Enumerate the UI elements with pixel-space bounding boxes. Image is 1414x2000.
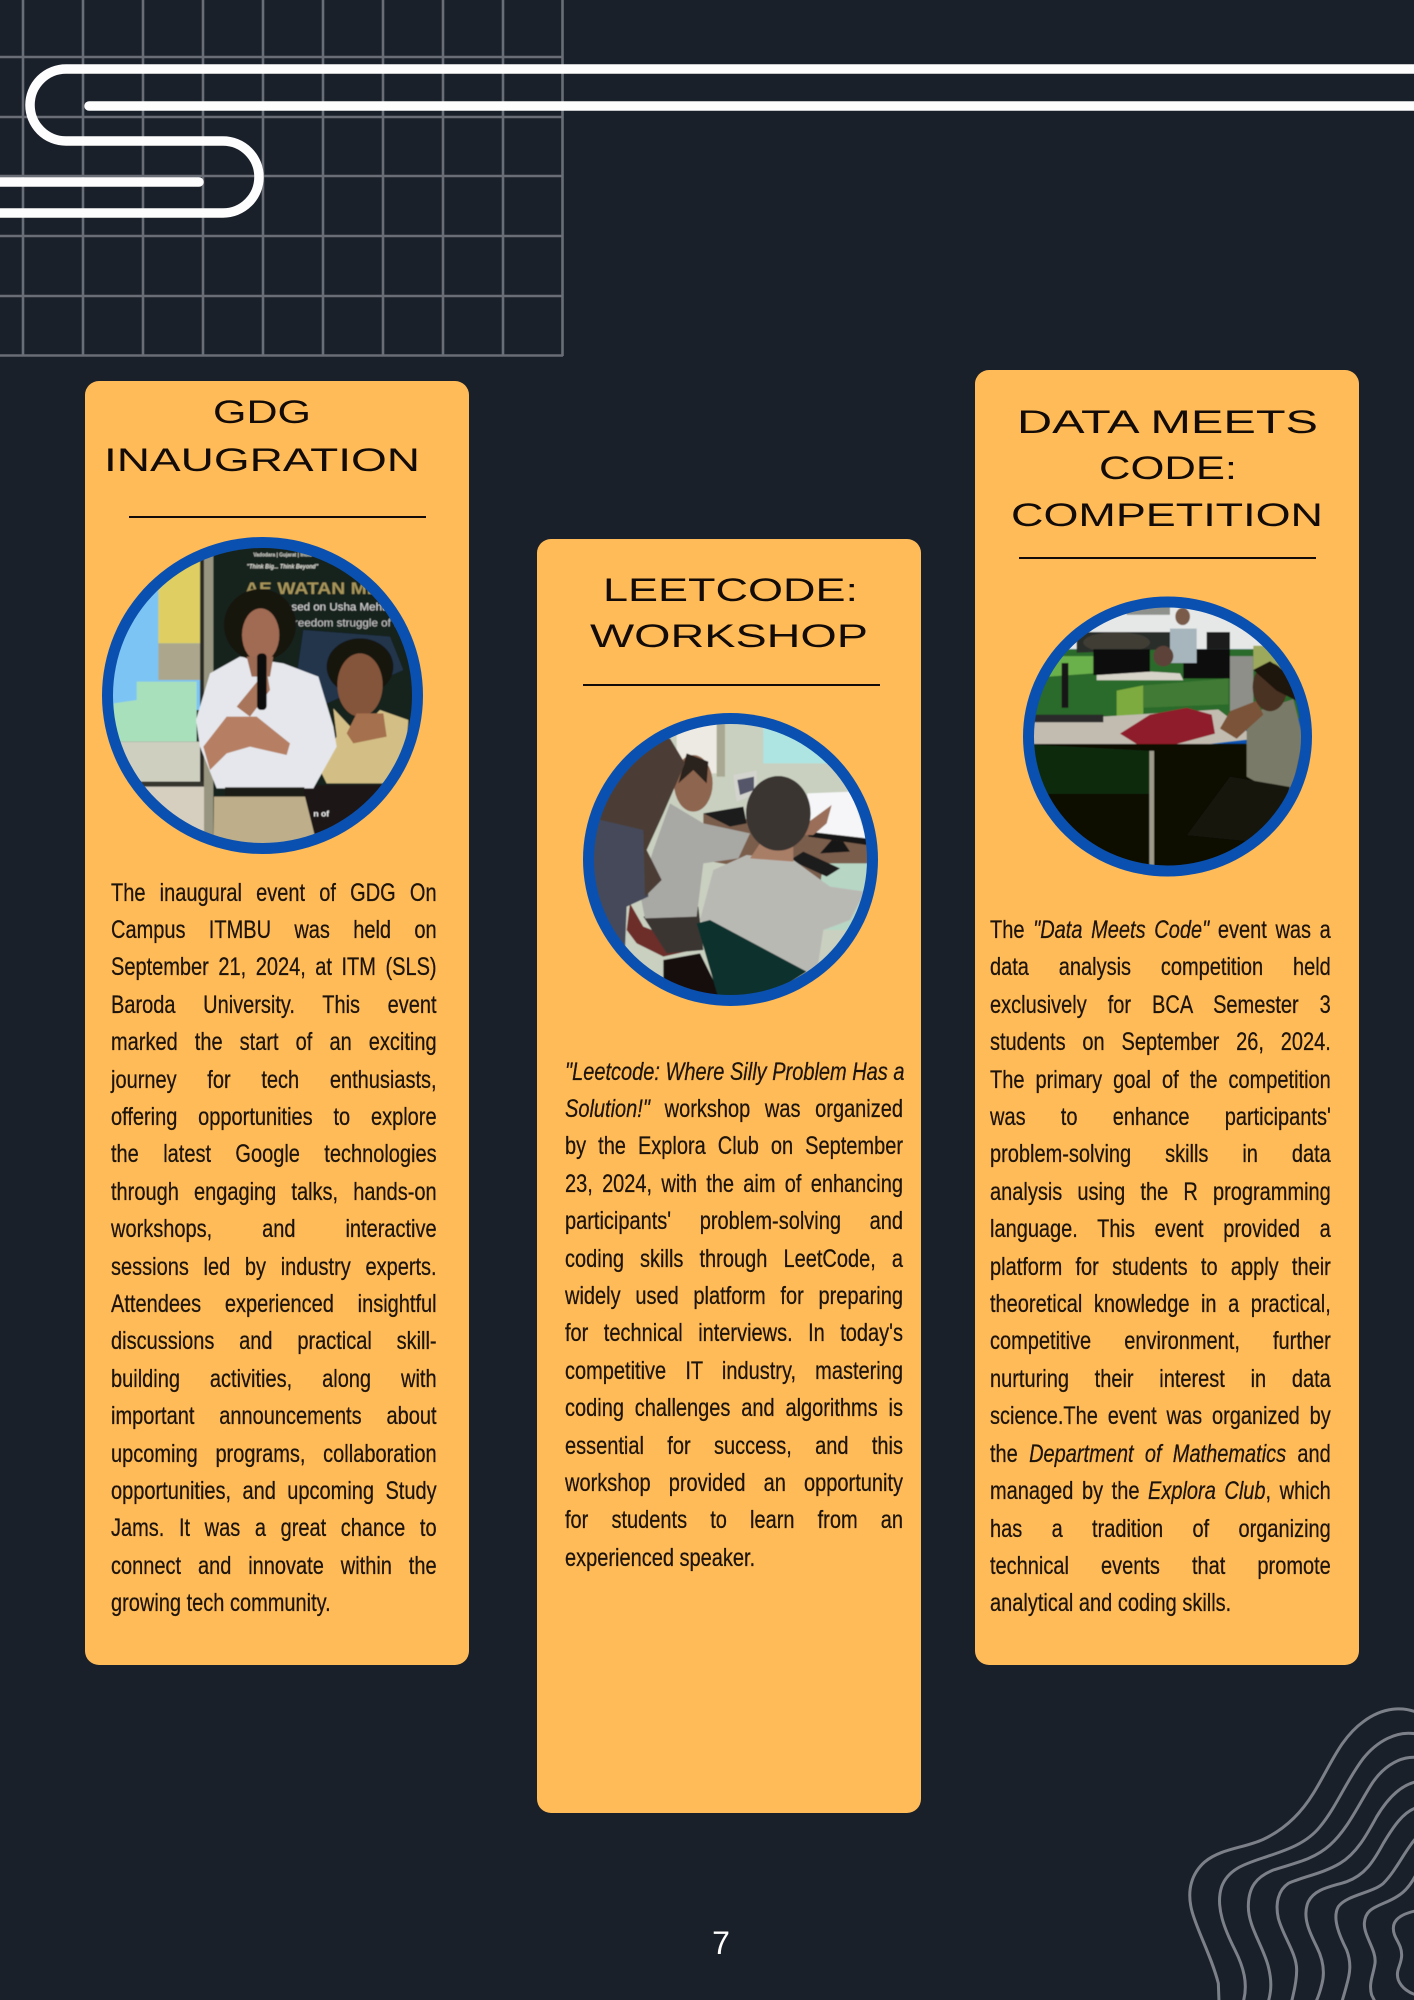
decorative contour waves: [1188, 1707, 1414, 2000]
panel: GDG inauguration: [85, 381, 469, 1665]
text block: GDG inauguration description: The inaugural event of GDG On: [110, 878, 436, 906]
text block: LeetCode workshop description: for technical interviews. In today's: [565, 1319, 903, 1347]
heading: GDG Inaugration: GDG: [213, 394, 311, 430]
text block: GDG inauguration description: Campus ITMBU was held on: [110, 916, 436, 944]
heading: LeetCode workshop: [590, 572, 868, 654]
decorative grid and white ribbon line: [0, 0, 1414, 357]
text block: Data Meets Code description: theoretical knowledge in a practical,: [990, 1290, 1330, 1318]
text block: Data Meets Code description: has a tradition of organizing: [990, 1514, 1330, 1542]
text block: GDG inauguration description: offering opportunities to explore: [110, 1103, 436, 1131]
text block: GDG inauguration description: marked the start of an exciting: [110, 1028, 436, 1056]
text block: LeetCode workshop description: Solution!" workshop was organized: [565, 1095, 903, 1123]
text block: GDG inauguration description: discussions and practical skill-: [110, 1327, 436, 1355]
text block: LeetCode workshop description: by the Explora Club on September: [565, 1132, 903, 1160]
heading: Data Meets Code competition: [1011, 404, 1323, 533]
text block: Data Meets Code description: analytical and coding skills.: [990, 1589, 1231, 1617]
text block: Data Meets Code description: managed by the Explora Club, which: [990, 1477, 1330, 1505]
text block: LeetCode workshop description: essential for success, and this: [565, 1432, 903, 1460]
text block: LeetCode workshop description: participants' problem-solving and: [565, 1207, 903, 1235]
text block: GDG inauguration description: journey for tech enthusiasts,: [110, 1066, 436, 1094]
text block: Data Meets Code description: science.The event was organized by: [990, 1402, 1330, 1430]
text block: LeetCode workshop description: coding skills through LeetCode, a: [565, 1245, 903, 1273]
text block: Data Meets Code description: [990, 916, 1331, 1617]
text block: Data Meets Code description: analysis using the R programming: [990, 1178, 1330, 1206]
text block: GDG inauguration description: workshops, and interactive: [110, 1215, 436, 1243]
text block: Data Meets Code description: platform for students to apply their: [990, 1253, 1330, 1281]
text block: GDG inauguration description: Baroda University. This event: [110, 991, 436, 1019]
text block: Data Meets Code description: students on September 26, 2024.: [990, 1028, 1330, 1056]
text block: Data Meets Code description: technical events that promote: [990, 1552, 1330, 1580]
text block: GDG inauguration description: upcoming programs, collaboration: [110, 1440, 436, 1468]
page number: 7: [712, 1925, 730, 1961]
photo: competition in a computer lab: [1020, 594, 1320, 882]
heading: GDG Inaugration: INAUGRATION: [104, 442, 420, 478]
text block: Data Meets Code description: the Department of Mathematics and: [990, 1440, 1330, 1468]
text block: GDG inauguration description: building activities, along with: [110, 1365, 436, 1393]
text block: GDG inauguration description: September 21, 2024, at ITM (SLS): [110, 953, 436, 981]
text block: LeetCode workshop description: competitive IT industry, mastering: [565, 1357, 903, 1385]
text block: LeetCode workshop description: [564, 1058, 904, 1572]
text block: LeetCode workshop description: experienced speaker.: [565, 1544, 755, 1572]
photo: speaker at the inaugural event: AE WATAN MEI: [245, 579, 385, 598]
text block: GDG inauguration description: Jams. It was a great chance to: [110, 1514, 436, 1542]
heading: GDG Inaugration: [104, 394, 420, 478]
text block: GDG inauguration description: connect and innovate within the: [110, 1552, 436, 1580]
text block: GDG inauguration description: important announcements about: [110, 1402, 436, 1430]
text block: Data Meets Code description: data analysis competition held: [990, 953, 1330, 981]
panel: Data Meets Code competition: [975, 370, 1359, 1665]
heading: Data Meets Code competition: DATA MEETS: [1017, 404, 1318, 440]
text block: GDG inauguration description: opportunities, and upcoming Study: [110, 1477, 436, 1505]
photo: speaker at the inaugural event: Vadodara | Gujarat | India: [253, 553, 312, 559]
heading: Data Meets Code competition: COMPETITION: [1011, 497, 1323, 533]
heading: Data Meets Code competition: CODE:: [1099, 450, 1237, 486]
photo: speaker at the inaugural event: ased on Usha Mehta: [285, 602, 393, 614]
text block: LeetCode workshop description: widely used platform for preparing: [565, 1282, 903, 1310]
text block: GDG inauguration description: the latest Google technologies: [110, 1140, 436, 1168]
text block: Data Meets Code description: competitive environment, further: [990, 1327, 1330, 1355]
text block: Data Meets Code description: was to enhance participants': [990, 1103, 1330, 1131]
text block: GDG inauguration description: [110, 878, 437, 1617]
text block: Data Meets Code description: language. This event provided a: [990, 1215, 1330, 1243]
text block: LeetCode workshop description: "Leetcode: Where Silly Problem Has a: [565, 1058, 904, 1086]
text block: Data Meets Code description: exclusively for BCA Semester 3: [990, 991, 1330, 1019]
text block: LeetCode workshop description: 23, 2024, with the aim of enhancing: [565, 1170, 903, 1198]
photo: speaker at the inaugural event: n of: [313, 809, 329, 819]
text block: GDG inauguration description: through engaging talks, hands-on: [110, 1178, 436, 1206]
text block: GDG inauguration description: growing tech community.: [110, 1589, 330, 1617]
photo: speaker at the inaugural event: [100, 537, 427, 857]
photo: speaker at the inaugural event: reedom struggle of I: [294, 618, 397, 630]
photo: speaker at the inaugural event: "Think Big... Think Beyond": [247, 563, 319, 570]
text block: LeetCode workshop description: coding challenges and algorithms is: [565, 1394, 903, 1422]
heading: LeetCode workshop: WORKSHOP: [590, 618, 868, 654]
text block: LeetCode workshop description: for students to learn from an: [565, 1506, 903, 1534]
text block: Data Meets Code description: nurturing their interest in data: [990, 1365, 1330, 1393]
text block: Data Meets Code description: The primary goal of the competition: [990, 1066, 1330, 1094]
text block: GDG inauguration description: sessions led by industry experts.: [110, 1253, 436, 1281]
photo: students at a computer: [580, 710, 880, 1013]
text block: LeetCode workshop description: workshop provided an opportunity: [565, 1469, 903, 1497]
text block: Data Meets Code description: The "Data Meets Code" event was a: [990, 916, 1330, 944]
panel: LeetCode workshop: [537, 539, 921, 1813]
text block: Data Meets Code description: problem-solving skills in data: [990, 1140, 1330, 1168]
text block: GDG inauguration description: Attendees experienced insightful: [110, 1290, 436, 1318]
heading: LeetCode workshop: LEETCODE:: [603, 572, 858, 608]
